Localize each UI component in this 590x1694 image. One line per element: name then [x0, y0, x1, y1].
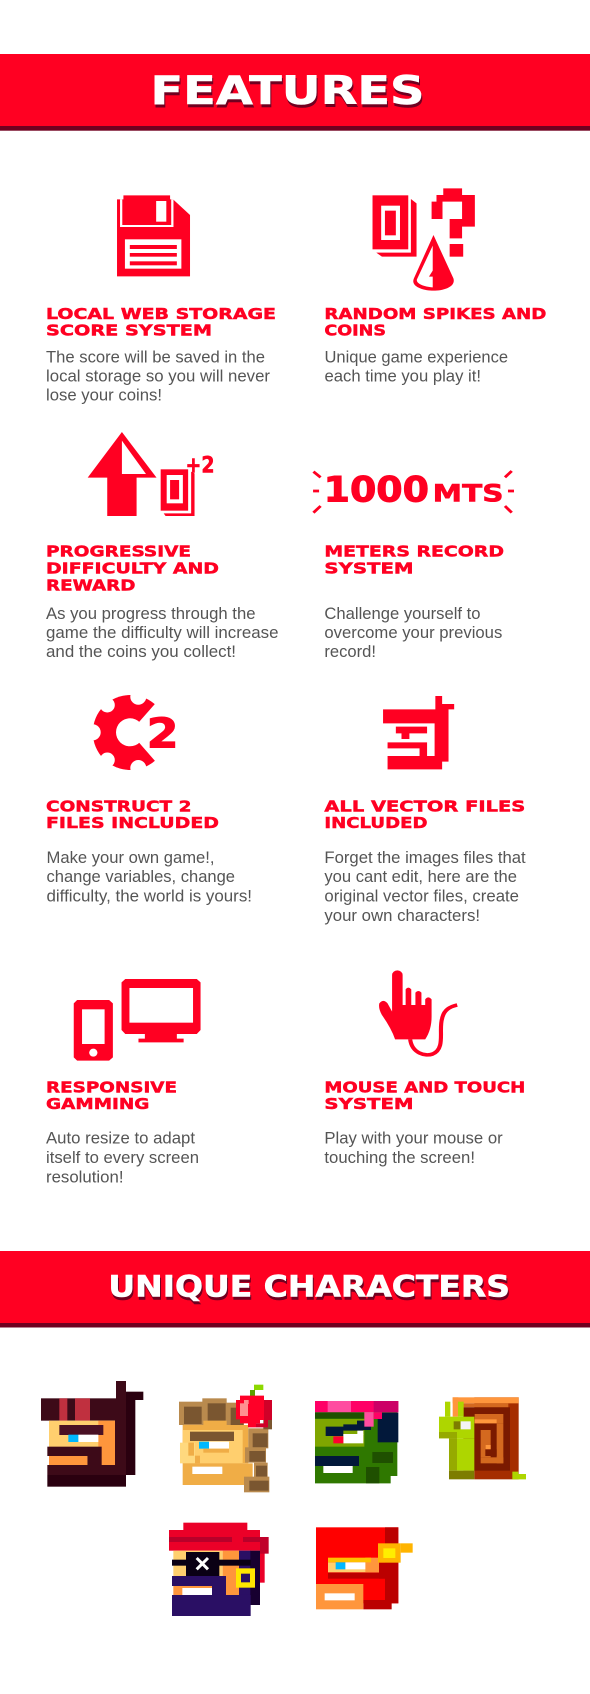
character: pirate	[169, 1523, 269, 1616]
heading: SYSTEM	[324, 1095, 414, 1113]
character: crate head with apple	[179, 1385, 272, 1492]
body text	[46, 1130, 199, 1187]
body text: itself to every screen	[46, 1149, 199, 1167]
heading: RESPONSIVE	[46, 1079, 177, 1097]
text: two: 2	[147, 709, 179, 757]
icon: vector character silhouette	[383, 696, 454, 769]
heading: FILES INCLUDED	[46, 814, 219, 832]
character: red ninja	[316, 1527, 413, 1609]
body text: each time you play it!	[324, 367, 481, 385]
panel: construct 2	[46, 680, 252, 906]
panel: meters record	[313, 471, 514, 661]
heading: RANDOM SPIKES AND	[324, 305, 547, 323]
icon: 1000 mts counter: MTS	[433, 480, 504, 508]
body text: original vector files, create	[324, 888, 519, 906]
body text: overcome your previous	[324, 624, 502, 642]
heading: ALL VECTOR FILES	[324, 798, 525, 816]
heading	[46, 543, 219, 595]
heading: REWARD	[46, 577, 136, 595]
body text: and the coins you collect!	[46, 643, 236, 661]
icon: construct 2 gear	[85, 680, 179, 785]
body text: change variables, change	[46, 868, 235, 886]
heading: COINS	[324, 322, 386, 340]
heading: DIFFICULTY AND	[46, 560, 219, 578]
body text: The score will be saved in the	[46, 348, 265, 366]
body text: game the difficulty will increase	[46, 624, 278, 642]
character: green zombie	[315, 1401, 398, 1483]
body text: Challenge yourself to	[324, 605, 480, 623]
body text	[324, 1130, 503, 1167]
heading: INCLUDED	[324, 814, 428, 832]
body text: Forget the images files that	[324, 849, 526, 867]
body text	[46, 605, 278, 661]
body text: Play with your mouse or	[324, 1130, 503, 1148]
heading: METERS RECORD	[324, 543, 504, 561]
body text	[324, 605, 502, 661]
panel: mouse and touch	[324, 970, 525, 1167]
body text: Auto resize to adapt	[46, 1130, 195, 1148]
body text: record!	[324, 643, 376, 661]
icon: phone and monitor	[74, 979, 201, 1061]
icon: coin, question mark and spike	[373, 188, 475, 291]
panel: vector files	[324, 696, 526, 925]
icon: 1000 mts counter: 1000	[324, 471, 429, 511]
body text: lose your coins!	[46, 386, 162, 404]
body text	[46, 849, 252, 906]
heading: SCORE SYSTEM	[46, 322, 212, 340]
heading: CONSTRUCT 2	[46, 798, 192, 816]
icon: 1000 mts counter	[313, 471, 514, 513]
icon: arrow and coins	[88, 432, 214, 516]
body text: touching the screen!	[324, 1149, 475, 1167]
body text	[46, 348, 271, 404]
heading	[324, 543, 504, 578]
heading: PROGRESSIVE	[46, 543, 191, 561]
body text: Unique game experience	[324, 348, 508, 366]
banner: unique characters	[0, 1251, 590, 1328]
panel: random spikes and coins	[324, 188, 547, 385]
title: unique characters: UNIQUE CHARACTERS	[108, 1270, 510, 1304]
body text: resolution!	[46, 1169, 124, 1187]
character: maroon hat	[41, 1381, 143, 1487]
body text: local storage so you will never	[46, 367, 271, 385]
panel: responsive gaming	[46, 979, 201, 1187]
body text	[324, 849, 526, 925]
heading	[324, 1079, 525, 1113]
text: plus two: +2	[186, 454, 214, 479]
heading: GAMMING	[46, 1095, 149, 1113]
body text	[324, 348, 508, 385]
banner: features	[0, 54, 590, 131]
heading	[46, 305, 276, 340]
panel: local web storage	[46, 195, 276, 404]
heading: LOCAL WEB STORAGE	[46, 305, 276, 323]
body text: As you progress through the	[46, 605, 256, 623]
body text: Make your own game!,	[46, 849, 214, 867]
body text: you cant edit, here are the	[324, 868, 517, 886]
heading: SYSTEM	[324, 560, 414, 578]
heading	[46, 1079, 177, 1113]
body text: difficulty, the world is yours!	[46, 888, 252, 906]
icon: hand and mouse cable	[379, 970, 457, 1055]
heading	[324, 798, 525, 832]
title: features: FEATURES	[150, 68, 424, 114]
panel: progressive difficulty	[46, 432, 278, 661]
heading: MOUSE AND TOUCH	[324, 1079, 525, 1097]
heading	[324, 305, 547, 340]
body text: your own characters!	[324, 907, 480, 925]
character: snail	[439, 1397, 526, 1479]
heading	[46, 798, 219, 832]
icon: floppy disk	[117, 195, 190, 276]
